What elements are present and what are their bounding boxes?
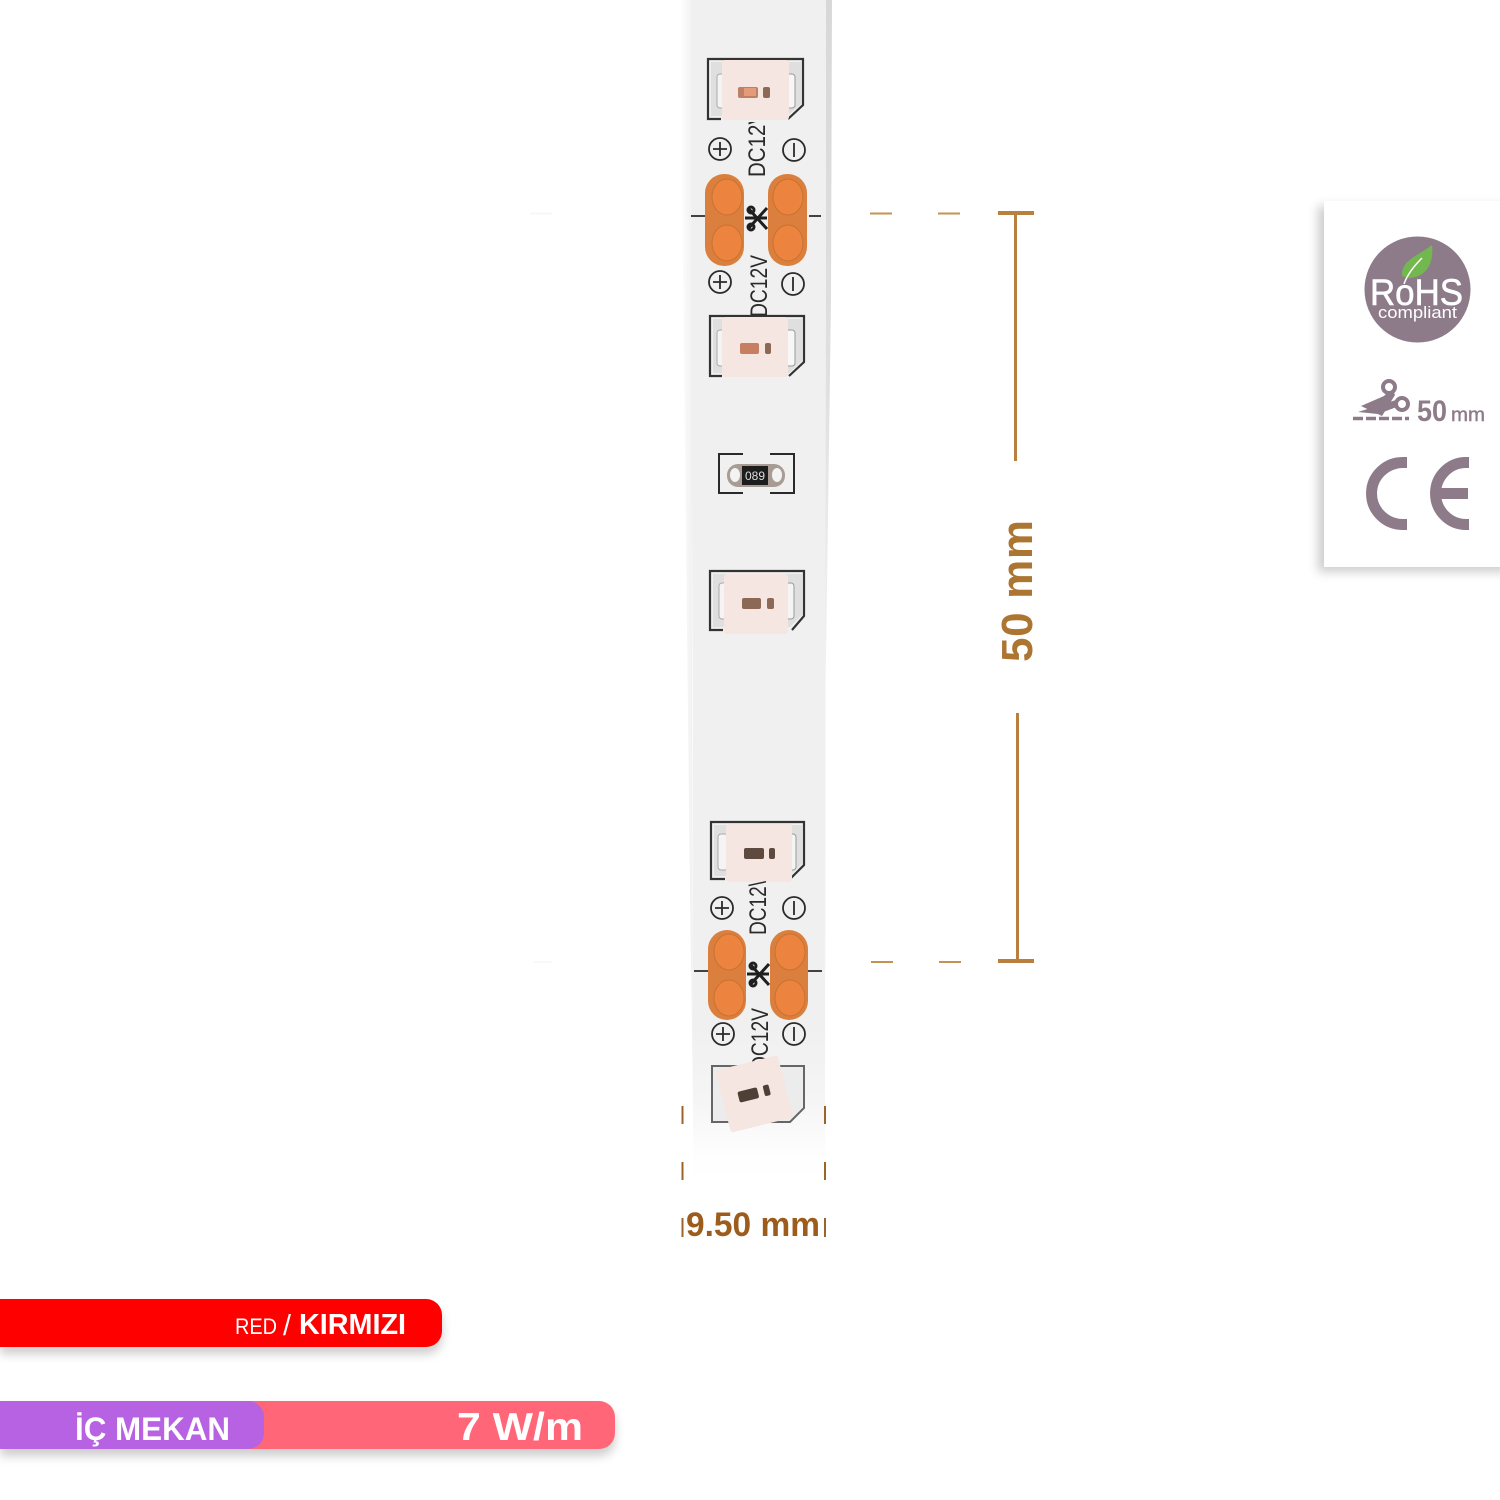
power and usage bar bbox=[0, 1401, 615, 1449]
polarity and voltage marks, lower pad bbox=[694, 897, 822, 1045]
LED 5 rotated bbox=[712, 1055, 804, 1133]
icon: RoHS compliant: RoHS bbox=[1370, 272, 1463, 313]
cut mark lower bbox=[747, 963, 769, 986]
resistor bbox=[719, 454, 794, 493]
colour bar labels: / bbox=[283, 1310, 292, 1342]
dimension: 50 mm: 50 mm bbox=[993, 520, 1042, 662]
LED 3 bbox=[710, 571, 804, 634]
icon: scissors 50 mm: mm bbox=[1451, 405, 1485, 426]
LED strip diagram bbox=[530, 0, 1034, 1237]
strip body bbox=[530, 0, 832, 1190]
usage label: İÇ MEKAN bbox=[75, 1411, 230, 1447]
certification panel bbox=[1324, 201, 1500, 567]
voltage text top: DC12V bbox=[744, 111, 771, 177]
colour bar labels bbox=[235, 1309, 406, 1342]
LED 1 bbox=[708, 59, 803, 120]
solder pads top bbox=[705, 174, 807, 266]
dimension: 50 mm bbox=[870, 213, 1042, 962]
LED 4 bbox=[711, 822, 804, 882]
LED 2 bbox=[710, 316, 804, 377]
usage segment bbox=[0, 1401, 264, 1449]
voltage text bottom lower: DC12V bbox=[747, 1008, 774, 1070]
icon: scissors 50 mm: 50 bbox=[1417, 395, 1447, 428]
voltage text lower: DC12V bbox=[746, 255, 773, 317]
certification icons bbox=[1353, 236, 1485, 530]
icon: RoHS compliant bbox=[1364, 236, 1470, 342]
polarity and voltage marks, top pad bbox=[691, 138, 821, 295]
voltage text bottom upper: DC12\ bbox=[745, 881, 772, 935]
icon: CE mark bbox=[1372, 462, 1469, 524]
colour bar labels: RED bbox=[235, 1314, 277, 1339]
solder pads lower bbox=[708, 930, 808, 1020]
icon: scissors 50 mm bbox=[1353, 381, 1485, 428]
power value: 7 W/m bbox=[457, 1406, 583, 1449]
icon: RoHS compliant: compliant bbox=[1378, 303, 1457, 322]
resistor: 089 bbox=[745, 469, 765, 483]
colour bar: red bbox=[0, 1299, 442, 1347]
colour bar labels: KIRMIZI bbox=[299, 1309, 406, 1341]
dimension: 9.50 mm: 9.50 mm bbox=[686, 1206, 820, 1244]
dimension: 9.50 mm bbox=[682, 1106, 825, 1244]
cut mark top bbox=[745, 207, 767, 230]
